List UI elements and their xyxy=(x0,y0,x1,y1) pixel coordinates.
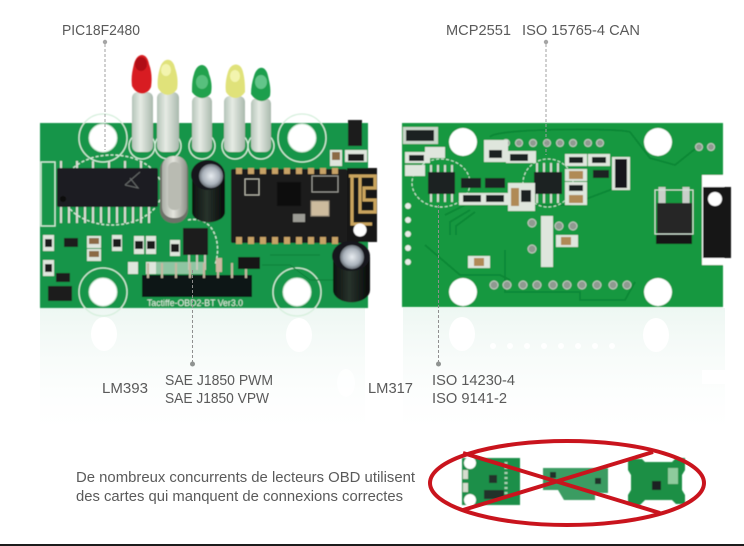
voltage regulator LM317 xyxy=(655,187,693,244)
back circuit board xyxy=(402,123,731,307)
bottom border line xyxy=(0,544,744,546)
bluetooth module xyxy=(231,168,377,244)
LED tube 2 yellow xyxy=(157,60,179,152)
note about competitors xyxy=(76,469,416,505)
LED tube 1 red xyxy=(132,55,153,152)
label: ISO 14230-4 and ISO 9141-2: ISO 9141-2 xyxy=(432,390,507,407)
black connector tab xyxy=(702,175,731,265)
electrolytic capacitor bottom xyxy=(332,241,370,302)
module solder pads xyxy=(236,168,338,244)
crystal oscillator xyxy=(160,156,188,223)
label: ISO 14230-4 and ISO 9141-2 xyxy=(432,372,515,407)
label: SAE J1850 PWM and VPW xyxy=(165,372,273,407)
label: LM317: LM317 xyxy=(368,380,413,397)
pin header: Tactiffe-OBD2-BT Ver3.0 xyxy=(147,298,243,308)
leader line: ISO 14230-4 xyxy=(436,205,441,366)
front circuit board xyxy=(40,55,377,316)
board base xyxy=(40,123,368,308)
reflection of front board xyxy=(40,308,365,430)
label: LM393: LM393 xyxy=(102,380,148,397)
LED tube 5 green xyxy=(251,68,271,152)
electrolytic capacitor top xyxy=(191,160,225,222)
edge pads xyxy=(405,203,411,265)
label: MCP2551: MCP2551 xyxy=(446,22,511,39)
note about competitors: De nombreux concurrents de lecteurs OBD utilisent xyxy=(76,469,416,486)
mounting holes xyxy=(89,124,316,306)
IC left SOIC xyxy=(412,159,470,207)
IC MCP2551 SOIC xyxy=(523,159,573,207)
mounting holes xyxy=(449,128,672,306)
traces xyxy=(425,129,700,300)
microcontroller chip PIC18F2480 xyxy=(57,161,158,223)
competitor board 1 xyxy=(462,457,520,506)
label: ISO 14230-4 and ISO 9141-2: ISO 14230-4 xyxy=(432,372,515,389)
solder pads row bottom xyxy=(490,219,631,289)
back small components xyxy=(403,127,630,268)
competitor board 2 xyxy=(543,468,608,500)
small components xyxy=(43,120,367,301)
crossed-out competitor boards xyxy=(430,441,704,525)
label: PIC18F2480: PIC18F2480 xyxy=(62,22,140,39)
leader line: SAE J1850 xyxy=(190,256,195,385)
LED tube 3 green xyxy=(192,65,212,152)
LED tube 4 yellow xyxy=(224,64,245,152)
pin header xyxy=(142,257,260,308)
solder pads row top xyxy=(502,140,714,150)
reflection of back board xyxy=(403,308,725,430)
LED light pipes xyxy=(132,55,271,152)
label: SAE J1850 PWM and VPW: SAE J1850 VPW xyxy=(165,390,270,407)
red prohibition ellipse and cross xyxy=(430,441,704,525)
LM393 chip xyxy=(183,228,208,270)
board base xyxy=(402,123,723,307)
leader line: PIC18F2480 xyxy=(103,40,107,150)
note about competitors: des cartes qui manquent de connexions correctes xyxy=(76,488,403,505)
leader line: MCP2551 xyxy=(544,40,548,155)
label: ISO 15765-4 CAN: ISO 15765-4 CAN xyxy=(522,22,640,39)
competitor board 3 xyxy=(628,458,685,505)
label: SAE J1850 PWM and VPW: SAE J1850 PWM xyxy=(165,372,273,389)
